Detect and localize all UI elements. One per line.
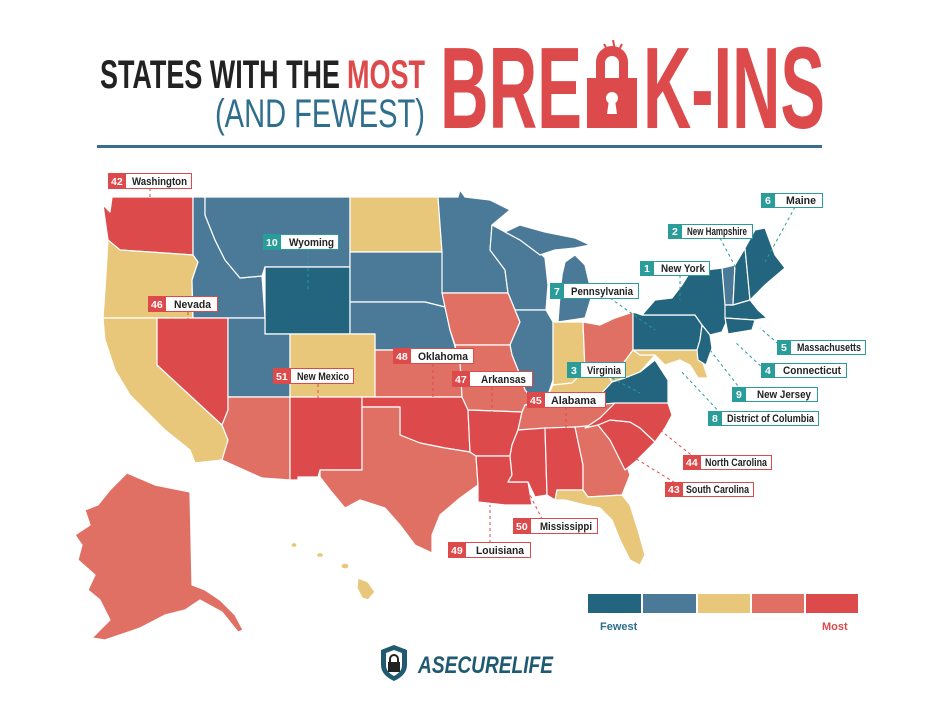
label: 3 Virginia <box>567 362 626 378</box>
state: Missouri <box>455 345 535 412</box>
state: Maine <box>745 228 785 300</box>
state: Tennessee <box>518 403 615 430</box>
legend <box>588 594 858 633</box>
label: 47 Arkansas: 47 <box>455 374 467 386</box>
state: Mississippi <box>508 428 547 497</box>
label: 8 District of Columbia: 8 <box>712 413 718 425</box>
label: 50 Mississippi: Mississippi <box>540 521 592 533</box>
label: 6 Maine: 6 <box>765 195 771 207</box>
state: Kansas <box>375 350 462 397</box>
label: 10 Wyoming: 10 <box>266 237 278 249</box>
label: 9 New Jersey <box>732 387 818 402</box>
leader lines <box>150 188 795 549</box>
state: New Jersey <box>697 325 712 365</box>
label: 49 Louisiana <box>448 542 530 558</box>
state: Florida <box>555 490 645 565</box>
label: 5 Massachusetts: Massachusetts <box>797 342 861 354</box>
label: 1 New York: New York <box>661 263 706 275</box>
label: 43 South Carolina: South Carolina <box>686 484 750 496</box>
state: South Carolina <box>598 420 655 470</box>
label: 45 Alabama: Alabama <box>551 395 597 407</box>
label: 42 Washington: 42 <box>111 176 123 188</box>
state: Idaho <box>192 197 265 318</box>
state: Vermont <box>722 265 735 305</box>
state: Ohio <box>583 312 633 370</box>
state: Illinois <box>510 310 553 402</box>
legend: Most <box>822 621 848 633</box>
state: Utah <box>228 318 290 397</box>
label: 1 New York: 1 <box>644 263 650 275</box>
state: New York <box>642 268 728 335</box>
label: 49 Louisiana: 49 <box>451 545 463 557</box>
state: Connecticut Rhode Island <box>725 318 755 334</box>
state: Minnesota <box>438 190 510 293</box>
state: Texas <box>320 407 478 553</box>
state: Maryland Delaware <box>633 350 708 378</box>
divider <box>97 145 822 148</box>
label: 46 Nevada <box>148 296 218 312</box>
state: Indiana <box>553 322 585 385</box>
state: California <box>103 318 228 463</box>
state: Oregon <box>103 240 198 318</box>
label: 46 Nevada: Nevada <box>174 299 212 311</box>
label: 42 Washington: Washington <box>132 176 187 188</box>
title: (AND FEWEST) <box>215 92 425 136</box>
state: New Hampshire <box>733 248 750 305</box>
title: STATES WITH THE <box>100 53 340 97</box>
label: 44 North Carolina: 44 <box>686 457 698 469</box>
label: 6 Maine <box>761 193 822 208</box>
label: 2 New Hampshire <box>668 224 752 239</box>
state: Kentucky <box>525 370 612 405</box>
label: 3 Virginia: Virginia <box>587 365 622 377</box>
label: 51 New Mexico <box>273 368 354 384</box>
label: 7 Pennsylvania: Pennsylvania <box>571 286 634 298</box>
label: 6 Maine: Maine <box>786 195 816 207</box>
state: Oklahoma <box>362 397 470 452</box>
label: 51 New Mexico: New Mexico <box>297 371 349 383</box>
state: Georgia <box>575 425 630 497</box>
state: North Dakota <box>350 197 442 252</box>
label: 4 Connecticut: 4 <box>765 365 771 377</box>
state: Virginia <box>595 360 668 405</box>
label: 48 Oklahoma: Oklahoma <box>418 351 469 363</box>
label: 5 Massachusetts <box>777 340 866 355</box>
label: 4 Connecticut: Connecticut <box>783 365 841 377</box>
label: 42 Washington <box>108 173 192 189</box>
state: North Carolina <box>585 403 672 442</box>
label: 48 Oklahoma: 48 <box>396 351 408 363</box>
state: Nebraska <box>350 302 456 350</box>
logo <box>381 645 554 681</box>
label: 1 New York <box>640 261 710 276</box>
label: 8 District of Columbia <box>708 411 818 426</box>
title: BRE <box>440 23 582 153</box>
state: Nevada <box>157 318 228 425</box>
state: Wisconsin <box>490 225 548 310</box>
state: Hawaii <box>291 542 375 600</box>
state: Colorado <box>290 334 375 397</box>
label: 45 Alabama <box>527 392 606 408</box>
label: 51 New Mexico: 51 <box>276 371 288 383</box>
state: Montana <box>205 197 350 278</box>
label: 2 New Hampshire: New Hampshire <box>687 226 747 238</box>
icon: broken padlock <box>587 40 637 128</box>
map <box>75 190 785 640</box>
state: New Mexico <box>290 397 362 480</box>
label: 10 Wyoming: Wyoming <box>289 237 334 249</box>
state: Wyoming <box>265 267 350 334</box>
legend: Fewest <box>600 621 638 633</box>
label: 3 Virginia: 3 <box>571 365 577 377</box>
state: Louisiana <box>476 456 532 505</box>
logo: ASECURELIFE <box>417 652 554 679</box>
label: 5 Massachusetts: 5 <box>781 342 787 354</box>
state: Alabama <box>545 427 583 500</box>
label: 50 Mississippi <box>513 518 598 534</box>
title: MOST <box>347 53 425 97</box>
state: Arizona <box>222 397 290 480</box>
label: 47 Arkansas <box>452 371 532 387</box>
label: 49 Louisiana: Louisiana <box>476 545 525 557</box>
label: 7 Pennsylvania <box>550 283 638 299</box>
label: 43 South Carolina: 43 <box>668 484 680 496</box>
state: Arkansas <box>468 410 522 456</box>
label: 2 New Hampshire: 2 <box>672 226 678 238</box>
state: South Dakota <box>350 252 445 307</box>
state: Michigan <box>505 225 592 322</box>
label: 45 Alabama: 45 <box>530 395 542 407</box>
label: 50 Mississippi: 50 <box>516 521 528 533</box>
label: 46 Nevada: 46 <box>151 299 163 311</box>
title <box>100 23 825 153</box>
state: West Virginia <box>605 350 655 382</box>
label: 44 North Carolina: North Carolina <box>705 457 768 469</box>
label: 9 New Jersey: New Jersey <box>757 389 812 401</box>
label: 47 Arkansas: Arkansas <box>481 374 526 386</box>
label: 10 Wyoming <box>263 234 338 250</box>
label: 8 District of Columbia: District of Columbia <box>727 413 815 425</box>
label: 4 Connecticut <box>761 363 846 378</box>
label: 43 South Carolina <box>665 482 754 497</box>
state: Pennsylvania <box>633 312 702 350</box>
state: Alaska <box>75 473 243 640</box>
label: 44 North Carolina <box>683 455 772 470</box>
label: 7 Pennsylvania: 7 <box>554 286 560 298</box>
label: 9 New Jersey: 9 <box>736 389 742 401</box>
state: Massachusetts <box>725 300 767 320</box>
state: Washington <box>103 197 193 255</box>
label: 48 Oklahoma <box>393 348 474 364</box>
state: Iowa <box>442 293 520 345</box>
